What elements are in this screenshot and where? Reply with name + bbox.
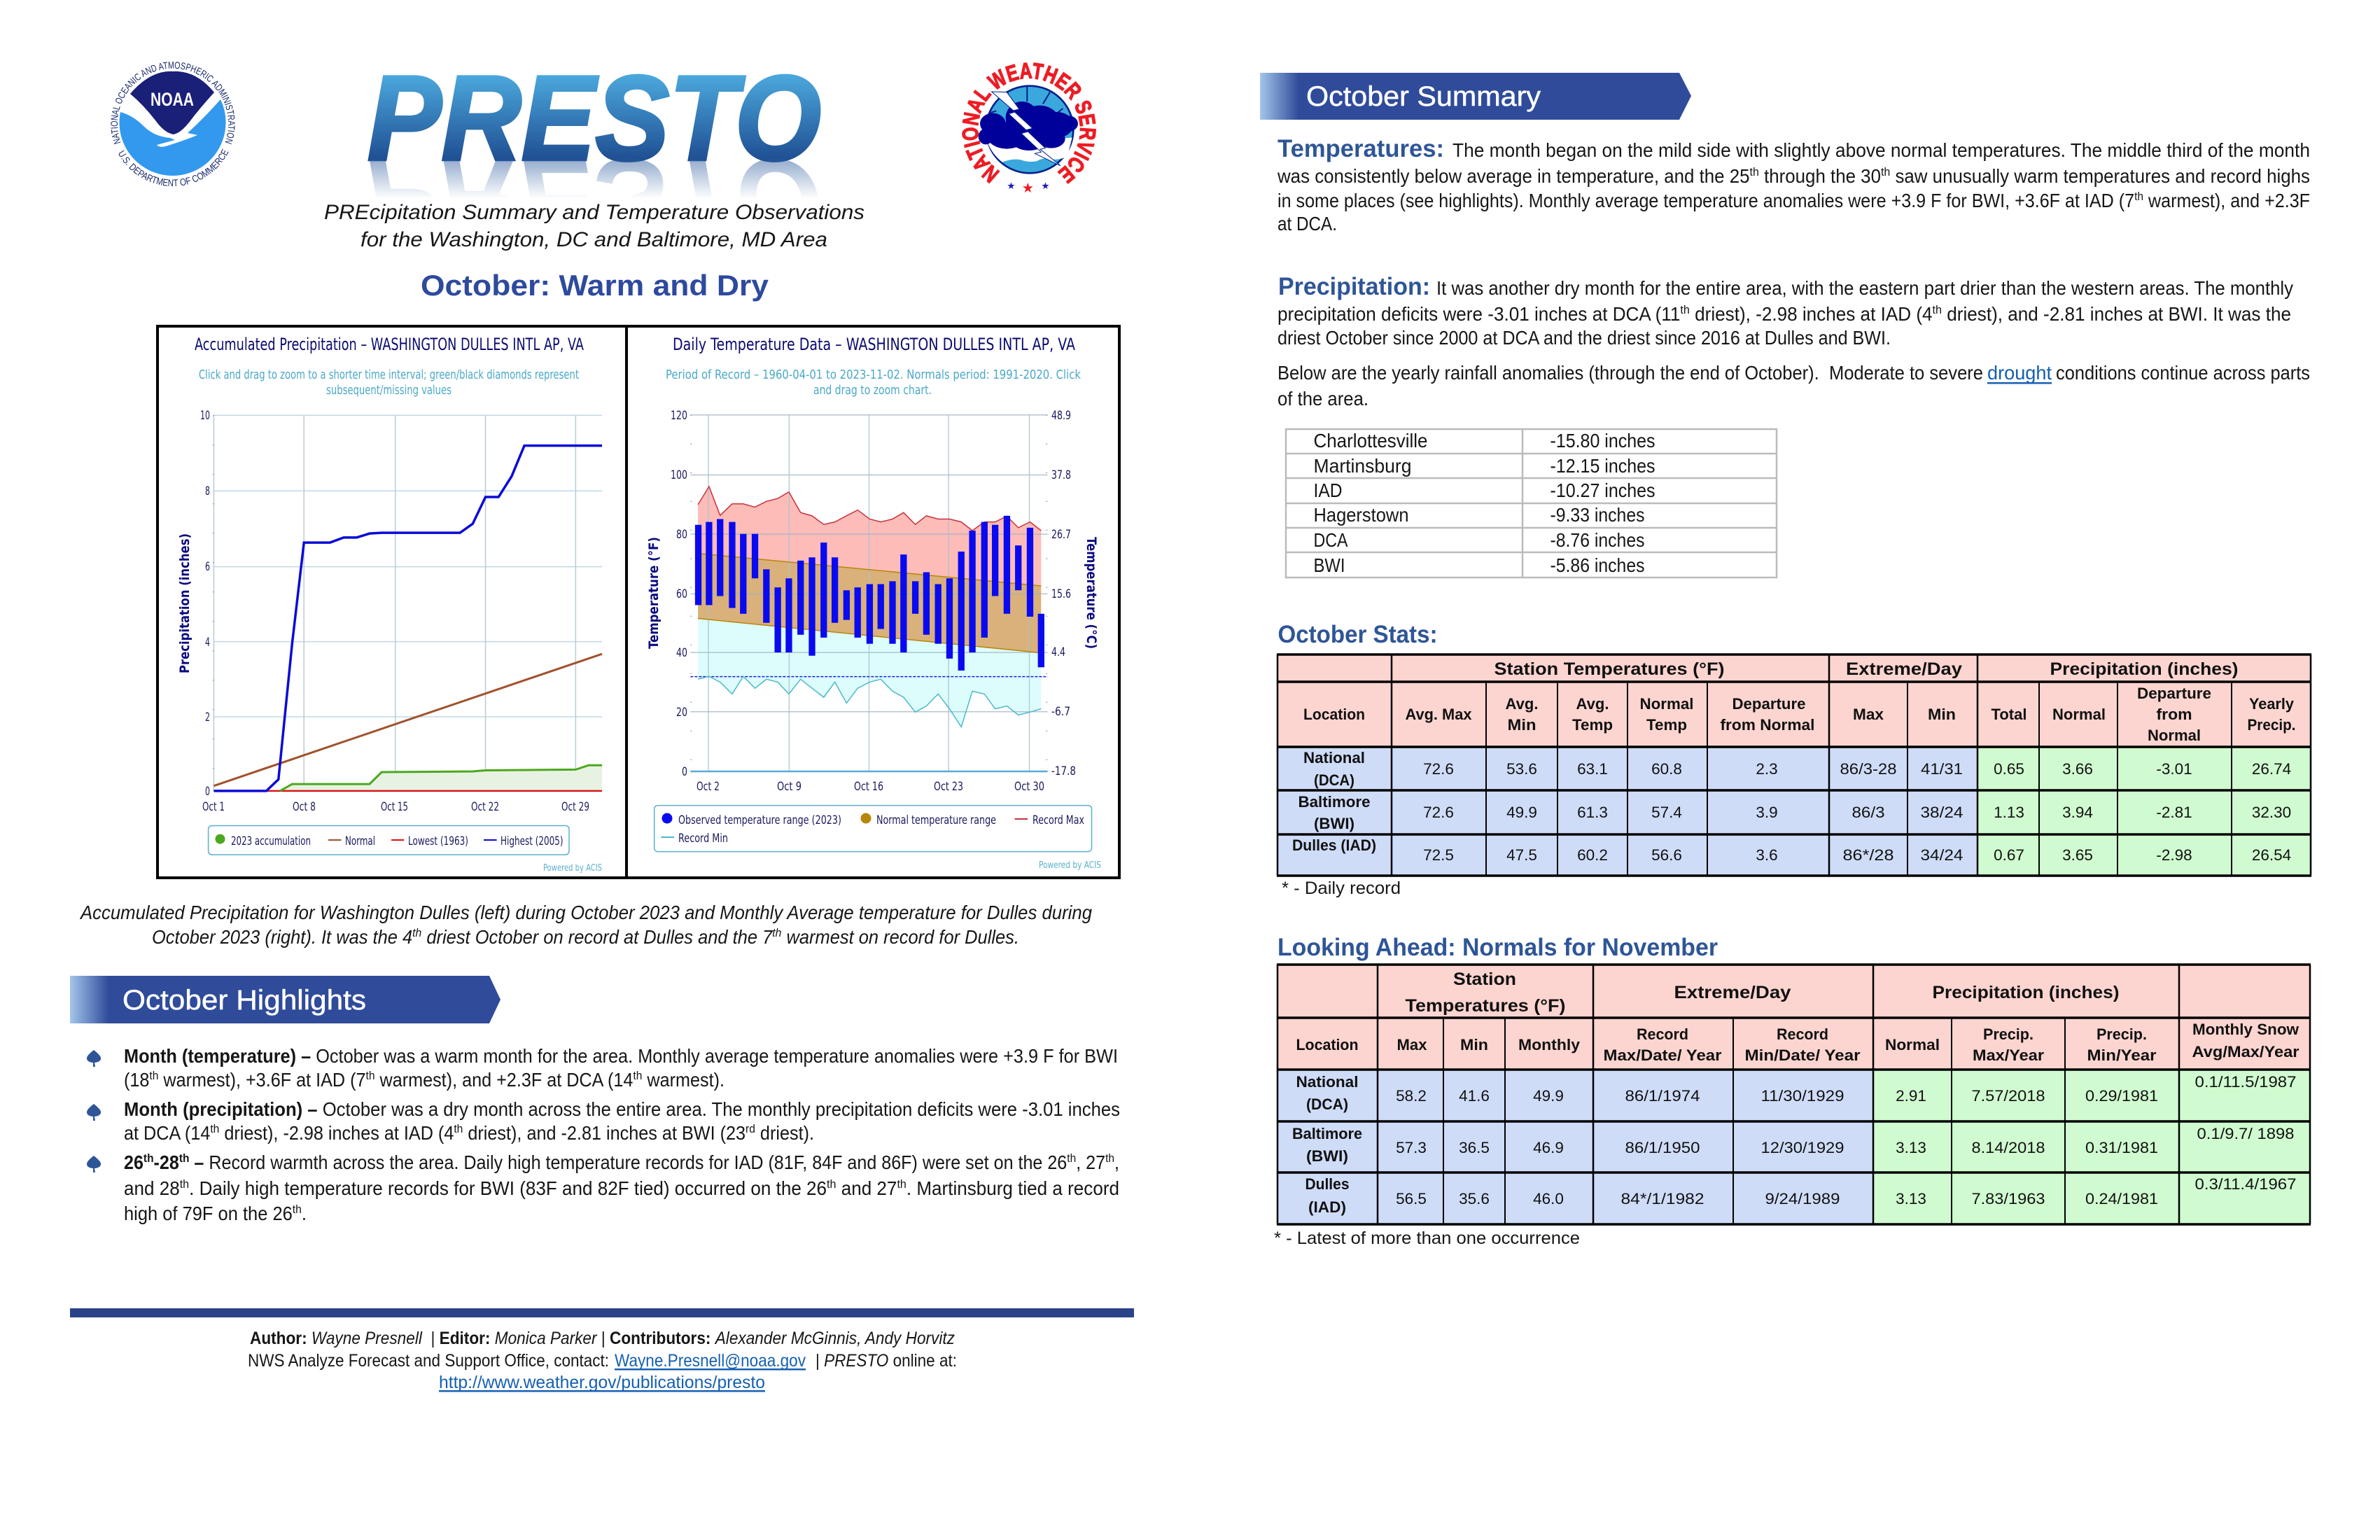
PRESTO wordmark: PRESTO: [368, 51, 821, 186]
footer credits: [248, 1329, 957, 1392]
table row: Dulles (IAD): 84*/1/1982: [1621, 1190, 1704, 1208]
highlight: month temperature: th: [366, 1069, 375, 1082]
highlight: 26th-28th record warmth: Record warmth across the area. Daily high temperature records for IAD (81F, 84F and 86F) were set on the 26: [209, 1152, 1150, 1173]
table: yearly rainfall anomalies: -10.27 inches: [1550, 479, 1655, 501]
highlight: month precipitation: Month (precipitation) – October was a dry month across the entire area. The monthly precipitation deficits were -3.01 inches: [124, 1098, 1120, 1120]
chart: daily temperature: Oct 9: [777, 780, 802, 794]
banner: October Summary: October Summary: [1306, 81, 1541, 112]
chart: daily temperature: 40: [676, 646, 687, 660]
table row: Baltimore (BWI): 8.14/2018: [1971, 1139, 2045, 1156]
text block: precipitation: [1278, 273, 2310, 410]
banner: October Highlights: [70, 976, 500, 1023]
highlight: month temperature: [124, 1045, 1118, 1091]
table row: National (DCA): (DCA): [1306, 1096, 1348, 1113]
icon: National Weather Service logo: ★: [1041, 181, 1049, 191]
table group headers: [1406, 969, 2120, 1016]
text block: precipitation: th: [1933, 303, 1942, 316]
table: yearly rainfall anomalies: -9.33 inches: [1550, 504, 1645, 526]
icon: bullet: [87, 1050, 101, 1067]
chart: accumulated precipitation: 0: [205, 785, 210, 799]
table: yearly rainfall anomalies: -5.86 inches: [1550, 554, 1645, 576]
table column headers: Temp: [1572, 716, 1613, 734]
table row: Baltimore (BWI): 36.5: [1459, 1139, 1490, 1156]
table column headers: Normal: [1639, 695, 1694, 713]
table row: Dulles (IAD): 9/24/1989: [1765, 1190, 1840, 1208]
table row: Dulles (IAD): 3.6: [1756, 846, 1778, 864]
highlight: month temperature: warmest), +3.6F at IAD (7: [158, 1069, 366, 1091]
chart legend: Record Max: [1032, 813, 1084, 827]
chart: daily temperature: Period of Record – 1960-04-01 to 2023-11-02. Normals period: 1991-2020. Click: [666, 368, 1081, 382]
chart: daily temperature: Daily Temperature Data – WASHINGTON DULLES INTL AP, VA: [673, 335, 1075, 354]
highlight: month temperature: (18: [124, 1069, 152, 1091]
table row: National (DCA): (DCA): [1314, 771, 1354, 789]
text block: precipitation: driest October since 2000 at DCA and the driest since 2016 at Dulles and BWI.: [1278, 327, 1891, 349]
icon: NOAA logo: NATIONAL OCEANIC AND ATMOSPHERIC ADMINISTRATION: [111, 62, 235, 144]
chart: accumulated precipitation: Oct 29: [561, 800, 589, 814]
text block: temperatures: at DCA.: [1278, 213, 1337, 234]
highlight: month precipitation: at DCA (14: [124, 1122, 218, 1144]
highlight: 26th-28th record warmth: and 28: [124, 1177, 183, 1199]
highlight: month temperature: th: [149, 1069, 158, 1082]
text block: temperatures: warmest), and +2.3F: [2143, 190, 2310, 211]
table row: Dulles (IAD): Dulles (IAD): [1292, 836, 1376, 854]
text block: temperatures: th: [1881, 165, 1890, 178]
chart caption: [79, 902, 1093, 948]
table row: Dulles (IAD): [1305, 1175, 2296, 1216]
table column headers: Avg. Max: [1406, 706, 1472, 723]
chart: daily temperature: Oct 23: [934, 780, 963, 794]
highlight: month temperature: th: [633, 1069, 642, 1082]
icon: NOAA logo: [111, 62, 235, 186]
text block: temperatures: saw unusually warm temperatures and record highs: [1890, 165, 2310, 187]
banner: October Highlights: October Highlights: [122, 985, 366, 1016]
table group headers: Temperatures (°F): [1406, 996, 1565, 1016]
title: October: Warm and Dry: [421, 269, 769, 302]
chart: daily temperature: 80: [676, 528, 687, 542]
table row: Dulles (IAD): -2.98: [2156, 846, 2192, 864]
table: yearly rainfall anomalies: -8.76 inches: [1550, 529, 1645, 551]
PRESTO wordmark: [368, 51, 821, 268]
table row: National (DCA): 0.29/1981: [2085, 1087, 2158, 1105]
table column headers: Avg.: [1505, 695, 1539, 713]
table row: Dulles (IAD): (IAD): [1308, 1198, 1346, 1216]
table row: Dulles (IAD): 0.3/11.4/1967: [2195, 1175, 2296, 1193]
table: yearly rainfall anomalies: DCA: [1313, 529, 1348, 551]
text block: temperatures: th: [1750, 165, 1759, 178]
chart: accumulated precipitation: 2: [205, 710, 210, 724]
table column headers: Min: [1928, 706, 1956, 723]
highlight: 26th-28th record warmth: .: [302, 1203, 307, 1224]
table row: Dulles (IAD): 56.5: [1396, 1190, 1427, 1208]
table row: National (DCA): 3.66: [2062, 760, 2093, 778]
highlight: 26th-28th record warmth: th: [180, 1177, 189, 1191]
table row: Baltimore (BWI): [1298, 793, 2291, 832]
table row: Baltimore (BWI): 72.6: [1423, 804, 1454, 821]
highlight: 26th-28th record warmth: th: [144, 1152, 154, 1165]
chart legend: Lowest (1963): [408, 834, 468, 848]
highlight: month temperature: warmest).: [642, 1069, 724, 1091]
table row: Dulles (IAD): Dulles: [1305, 1175, 1350, 1193]
table row: National (DCA): 7.57/2018: [1971, 1087, 2045, 1105]
icon: NOAA logo: NOAA: [150, 89, 194, 110]
chart legend: [654, 806, 1092, 852]
table column headers: Temp: [1646, 716, 1687, 734]
footer credits: http://www.weather.gov/publications/presto: [439, 1373, 765, 1392]
chart: accumulated precipitation: 4: [205, 636, 210, 650]
highlight: 26th-28th record warmth: . Martinsburg tied a record: [906, 1177, 1119, 1199]
table row: National (DCA): 72.6: [1423, 760, 1454, 778]
chart: daily temperature: 48.9: [1051, 409, 1071, 423]
table: yearly rainfall anomalies: Martinsburg: [1313, 455, 1411, 477]
chart caption: th: [772, 926, 781, 939]
table row: National (DCA): 58.2: [1396, 1087, 1427, 1105]
icon: National Weather Service logo: ★: [1022, 181, 1034, 196]
chart legend: Highest (2005): [500, 834, 564, 848]
table column headers: Max: [1397, 1036, 1427, 1054]
table row: Baltimore (BWI): 3.94: [2062, 804, 2093, 821]
chart: accumulated precipitation: 10: [200, 409, 210, 423]
highlight: month temperature: warmest), and +2.3F at DCA (14: [375, 1069, 633, 1091]
chart: accumulated precipitation: Oct 15: [381, 800, 408, 814]
chart caption: th: [412, 926, 421, 939]
table column headers: Normal: [2052, 706, 2106, 723]
chart: daily temperature: 100: [671, 468, 687, 482]
table column headers: Precip.: [1983, 1026, 2033, 1043]
table row: National (DCA): 49.9: [1533, 1087, 1564, 1105]
table row: Baltimore (BWI): -2.81: [2156, 804, 2192, 821]
chart: daily temperature: and drag to zoom chart.: [813, 383, 932, 398]
highlight: 26th-28th record warmth: -28: [154, 1152, 179, 1173]
chart: accumulated precipitation: [177, 335, 602, 874]
heading: Looking Ahead: Looking Ahead: Normals for November: [1278, 934, 1718, 961]
table row: National (DCA): -3.01: [2156, 760, 2192, 778]
table row: Dulles (IAD): 3.65: [2062, 846, 2093, 864]
table column headers: Monthly: [1518, 1036, 1580, 1054]
table row: Baltimore (BWI): 0.31/1981: [2085, 1139, 2158, 1156]
text block: temperatures: The month began on the mild side with slightly above normal temperatures. The middle third of the month: [1452, 139, 2310, 161]
highlight: 26th-28th record warmth: th: [293, 1203, 302, 1216]
table: November normals: [1277, 965, 2311, 1224]
table footnote: * - Daily record: [1282, 878, 1401, 898]
table row: Baltimore (BWI): 3.13: [1896, 1139, 1926, 1156]
table column headers: Departure: [1732, 695, 1806, 713]
text block: precipitation: Precipitation:: [1278, 273, 1430, 300]
highlight: 26th-28th record warmth: th: [827, 1177, 836, 1191]
highlight: 26th-28th record warmth: th: [1067, 1152, 1076, 1165]
highlight: month precipitation: [124, 1098, 1120, 1144]
footer credits: | PRESTO online at:: [816, 1351, 957, 1371]
table: yearly rainfall anomalies: -12.15 inches: [1550, 455, 1655, 477]
table column headers: Min: [1460, 1036, 1488, 1054]
highlight: 26th-28th record warmth: . Daily high temperature records for BWI (83F and 82F tied) occurred on the 26: [189, 1177, 827, 1199]
table row: National (DCA): 0.1/11.5/1987: [2195, 1073, 2296, 1091]
chart: daily temperature: 60: [676, 587, 687, 601]
chart: accumulated precipitation: subsequent/missing values: [326, 383, 451, 398]
table row: Baltimore (BWI): 32.30: [2252, 804, 2291, 821]
panel: chart images: [158, 326, 1119, 878]
subtitle: [324, 201, 864, 251]
footer credits: NWS Analyze Forecast and Support Office, contact:: [248, 1351, 609, 1371]
table: yearly rainfall anomalies: IAD: [1313, 479, 1343, 501]
table column headers: Normal: [1885, 1036, 1940, 1054]
table: yearly rainfall anomalies: Charlottesville: [1313, 430, 1428, 451]
chart: daily temperature: 15.6: [1051, 587, 1071, 601]
table row: Baltimore (BWI): 3.9: [1756, 804, 1778, 821]
table column headers: Normal: [2148, 727, 2201, 744]
table column headers: Location: [1296, 1036, 1358, 1054]
chart: daily temperature: Oct 30: [1014, 780, 1044, 794]
table column headers: Avg.: [1576, 695, 1609, 713]
chart: daily temperature: 37.8: [1051, 468, 1071, 482]
chart: accumulated precipitation: 6: [205, 560, 210, 574]
chart: daily temperature: [646, 335, 1101, 871]
table: yearly rainfall anomalies: BWI: [1313, 554, 1345, 576]
icon: bullet: [87, 1104, 101, 1121]
chart: daily temperature: Temperature (°C): [1084, 537, 1099, 649]
table row: Dulles (IAD): 86*/28: [1842, 846, 1894, 864]
text block: temperatures: Temperatures:: [1278, 135, 1444, 162]
chart caption: driest October on record at Dulles and the 7: [421, 926, 774, 948]
highlight: 26th-28th record warmth: th: [179, 1152, 189, 1165]
table row: Dulles (IAD): 0.24/1981: [2085, 1190, 2158, 1208]
table row: Baltimore (BWI): 57.3: [1396, 1139, 1427, 1156]
table column headers: Max/Date/ Year: [1603, 1046, 1722, 1064]
chart: accumulated precipitation: Oct 1: [202, 800, 225, 814]
table column headers: Avg/Max/Year: [2192, 1043, 2300, 1060]
chart legend: Record Min: [678, 832, 728, 846]
footer rule: [70, 1308, 1134, 1317]
table row: National (DCA): 41.6: [1459, 1087, 1490, 1105]
table row: Dulles (IAD): 72.5: [1423, 846, 1454, 864]
table column headers: Max: [1853, 706, 1884, 723]
table row: National (DCA): 86/3-28: [1840, 760, 1897, 778]
chart: daily temperature: 26.7: [1051, 528, 1071, 542]
PRESTO wordmark: PRESTO: [368, 134, 821, 268]
table: yearly rainfall anomalies: -15.80 inches: [1550, 430, 1655, 451]
highlight: 26th-28th record warmth: th: [897, 1177, 906, 1191]
chart legend: Normal temperature range: [876, 813, 996, 827]
table group headers: Extreme/Day: [1674, 983, 1791, 1002]
text block: temperatures: in some places (see highlights). Monthly average temperature anomalies were +3.9 F for BWI, +3.6F at IAD (7: [1278, 190, 2216, 211]
table row: National (DCA): 2.91: [1896, 1087, 1926, 1105]
table column headers: from Normal: [1721, 716, 1814, 734]
table column headers: [1303, 685, 2296, 744]
footer credits: Author: Wayne Presnell | Editor: Monica Parker | Contributors: Alexander McGinnis, Andy Horvitz: [250, 1329, 955, 1348]
table footnote: * - Latest of more than one occurrence: [1274, 1228, 1580, 1248]
chart legend: 2023 accumulation: [231, 834, 311, 848]
highlight: month precipitation: driest), and -2.81 inches at BWI (23: [463, 1122, 746, 1144]
table group headers: Precipitation (inches): [1932, 983, 2120, 1002]
table row: Baltimore (BWI): 61.3: [1577, 804, 1608, 821]
table: October stats: [1277, 654, 2311, 876]
table row: National (DCA): [1296, 1073, 2296, 1113]
chart: daily temperature: Powered by ACIS: [1039, 860, 1101, 871]
highlight: month precipitation: th: [210, 1122, 219, 1135]
table group headers: [1494, 659, 2239, 679]
chart: accumulated precipitation: Precipitation (inches): [177, 533, 192, 673]
chart: daily temperature: 120: [671, 409, 687, 423]
table row: Dulles (IAD): 35.6: [1459, 1190, 1490, 1208]
icon: National Weather Service logo: ★: [1007, 181, 1015, 191]
panel: highlights list: [87, 1045, 1120, 1224]
table column headers: Monthly Snow: [2192, 1021, 2299, 1038]
table row: Baltimore (BWI): Baltimore: [1298, 793, 1371, 811]
chart legend: Observed temperature range (2023): [678, 813, 841, 827]
table: yearly rainfall anomalies: [1286, 429, 1777, 578]
banner: October Summary: [1260, 73, 1691, 120]
table column headers: [1296, 1021, 2300, 1064]
table row: Dulles (IAD): 60.2: [1577, 846, 1608, 864]
chart caption: warmest on record for Dulles.: [781, 926, 1019, 948]
subtitle: for the Washington, DC and Baltimore, MD Area: [360, 228, 827, 251]
table group headers: Extreme/Day: [1846, 659, 1962, 679]
table column headers: Record: [1637, 1026, 1688, 1043]
text block: temperatures: was consistently below average in temperature, and the 25: [1278, 165, 1779, 187]
table group headers: Precipitation (inches): [2050, 659, 2239, 679]
highlight: 26th-28th record warmth: ,: [1114, 1152, 1119, 1173]
table row: National (DCA): 53.6: [1506, 760, 1537, 778]
highlight: 26th-28th record warmth: th: [1105, 1152, 1114, 1165]
table column headers: Min/Date/ Year: [1744, 1046, 1861, 1064]
text block: precipitation: driest), -2.98 inches at IAD (4: [1690, 303, 1933, 325]
highlight: 26th-28th record warmth: [124, 1152, 1119, 1224]
table row: National (DCA): National: [1296, 1073, 1358, 1091]
icon: National Weather Service logo: NATIONAL WEATHER SERVICE: [962, 62, 1096, 184]
footer credits: Wayne.Presnell@noaa.gov: [615, 1351, 806, 1371]
table row: Baltimore (BWI): 38/24: [1921, 804, 1963, 821]
table column headers: Location: [1303, 706, 1365, 723]
table row: Dulles (IAD): 0.67: [1994, 846, 2024, 864]
table row: Dulles (IAD): 26.54: [2252, 846, 2291, 864]
highlight: month precipitation: driest), -2.98 inches at IAD (4: [219, 1122, 454, 1144]
text block: precipitation: conditions continue across parts: [2056, 362, 2310, 384]
icon: NOAA logo: U.S. DEPARTMENT OF COMMERCE: [119, 148, 228, 186]
highlight: month precipitation: th: [454, 1122, 463, 1135]
table column headers: Departure: [2137, 685, 2211, 702]
highlight: month precipitation: rd: [746, 1122, 755, 1135]
table group headers: Station Temperatures (°F): [1494, 659, 1725, 679]
table column headers: Min/Year: [2087, 1046, 2157, 1064]
highlight: 26th-28th record warmth: , 27: [1076, 1152, 1105, 1173]
table column headers: Total: [1991, 706, 2027, 723]
table row: National (DCA): 63.1: [1577, 760, 1608, 778]
table row: Baltimore (BWI): Baltimore: [1292, 1125, 1362, 1142]
table row: Dulles (IAD): [1292, 836, 2291, 864]
table column headers: Max/Year: [1973, 1046, 2044, 1064]
table row: National (DCA): 41/31: [1921, 760, 1963, 778]
chart caption: Accumulated Precipitation for Washington Dulles (left) during October 2023 and Monthly Average temperature for Dulles during: [79, 902, 1093, 923]
table row: National (DCA): 2.3: [1756, 760, 1778, 778]
table row: Baltimore (BWI): 57.4: [1651, 804, 1682, 821]
chart: daily temperature: -17.8: [1051, 764, 1076, 778]
chart: daily temperature: 20: [676, 706, 687, 720]
text block: precipitation: driest), and -2.81 inches at BWI. It was the: [1942, 303, 2291, 325]
chart: daily temperature: -6.7: [1051, 705, 1070, 719]
table column headers: from: [2156, 706, 2192, 723]
table row: National (DCA): 86/1/1974: [1625, 1087, 1700, 1105]
table row: National (DCA): 26.74: [2252, 760, 2291, 778]
heading: October Stats: October Stats:: [1278, 621, 1438, 648]
table row: National (DCA): 0.65: [1994, 760, 2024, 778]
icon: bullet: [87, 1156, 101, 1172]
chart: accumulated precipitation: 8: [205, 484, 210, 498]
text block: temperatures: through the 30: [1759, 165, 1881, 187]
table row: Dulles (IAD): 56.6: [1651, 846, 1682, 864]
table column headers: Record: [1777, 1026, 1828, 1043]
table row: Baltimore (BWI): 86/1/1950: [1625, 1139, 1700, 1156]
highlight: month temperature: Month (temperature) – October was a warm month for the area. Monthly average temperature anomalies were +3.9 F for BWI: [124, 1045, 1118, 1067]
table row: Baltimore (BWI): 1.13: [1994, 804, 2024, 821]
chart: daily temperature: Temperature (°F): [646, 537, 662, 649]
text block: precipitation: precipitation deficits were -3.01 inches at DCA (11: [1278, 303, 1702, 325]
table row: National (DCA): National: [1303, 749, 1365, 766]
table column headers: Min: [1508, 716, 1536, 734]
table group headers: Station: [1453, 969, 1516, 989]
table row: Baltimore (BWI): [1292, 1125, 2295, 1165]
chart: accumulated precipitation: Powered by ACIS: [543, 863, 602, 874]
text block: temperatures: th: [2134, 190, 2143, 203]
table row: Dulles (IAD): 3.13: [1896, 1190, 1926, 1208]
chart caption: October 2023 (right). It was the 4: [152, 926, 433, 948]
table row: Dulles (IAD): 34/24: [1921, 846, 1963, 864]
chart: accumulated precipitation: Click and drag to zoom to a shorter time interval; green/black diamonds represent: [199, 368, 579, 382]
table column headers: Precip.: [2247, 716, 2296, 734]
highlight: 26th-28th record warmth: high of 79F on the 26: [124, 1203, 306, 1224]
table: yearly rainfall anomalies: Hagerstown: [1313, 504, 1408, 526]
table column headers: Yearly: [2249, 695, 2294, 713]
chart: daily temperature: Oct 2: [696, 780, 720, 794]
chart: accumulated precipitation: Accumulated Precipitation – WASHINGTON DULLES INTL AP, VA: [195, 335, 584, 354]
chart: daily temperature: 4.4: [1051, 645, 1065, 659]
table row: National (DCA): [1303, 749, 2291, 789]
text block: precipitation: of the area.: [1278, 388, 1368, 410]
chart legend: Normal: [345, 834, 375, 848]
table row: National (DCA): 11/30/1929: [1761, 1087, 1844, 1105]
table row: National (DCA): 60.8: [1651, 760, 1682, 778]
highlight: month precipitation: driest).: [755, 1122, 814, 1144]
table row: Dulles (IAD): 47.5: [1506, 846, 1537, 864]
chart: daily temperature: 0: [682, 765, 687, 779]
text block: precipitation: Below are the yearly rainfall anomalies (through the end of October). Moderate to severe: [1278, 362, 1983, 384]
highlight: 26th-28th record warmth: 26: [124, 1152, 144, 1173]
chart: daily temperature: Oct 16: [854, 780, 883, 794]
text block: precipitation: drought: [1987, 362, 2052, 384]
highlight: 26th-28th record warmth: –: [189, 1152, 204, 1173]
table row: Baltimore (BWI): 49.9: [1506, 804, 1537, 821]
subtitle: PREcipitation Summary and Temperature Observations: [324, 201, 864, 224]
table row: Baltimore (BWI): (BWI): [1306, 1147, 1348, 1165]
chart: accumulated precipitation: Oct 22: [471, 800, 499, 814]
chart: accumulated precipitation: Oct 8: [293, 800, 316, 814]
table row: Baltimore (BWI): 12/30/1929: [1761, 1139, 1844, 1156]
table row: Dulles (IAD): 46.0: [1533, 1190, 1564, 1208]
table row: Baltimore (BWI): 86/3: [1852, 804, 1884, 821]
table row: Baltimore (BWI): 46.9: [1533, 1139, 1564, 1156]
table row: Baltimore (BWI): 0.1/9.7/ 1898: [2197, 1125, 2295, 1142]
table row: Baltimore (BWI): (BWI): [1314, 815, 1354, 832]
highlight: 26th-28th record warmth: and 27: [836, 1177, 897, 1199]
table row: Dulles (IAD): 7.83/1963: [1971, 1190, 2045, 1208]
text block: temperatures: [1277, 135, 2310, 234]
table column headers: Precip.: [2096, 1026, 2147, 1043]
text block: precipitation: th: [1680, 303, 1690, 316]
chart legend: [209, 826, 569, 855]
text block: precipitation: It was another dry month for the entire area, with the eastern part drier than the western areas. The monthly: [1436, 277, 2293, 299]
